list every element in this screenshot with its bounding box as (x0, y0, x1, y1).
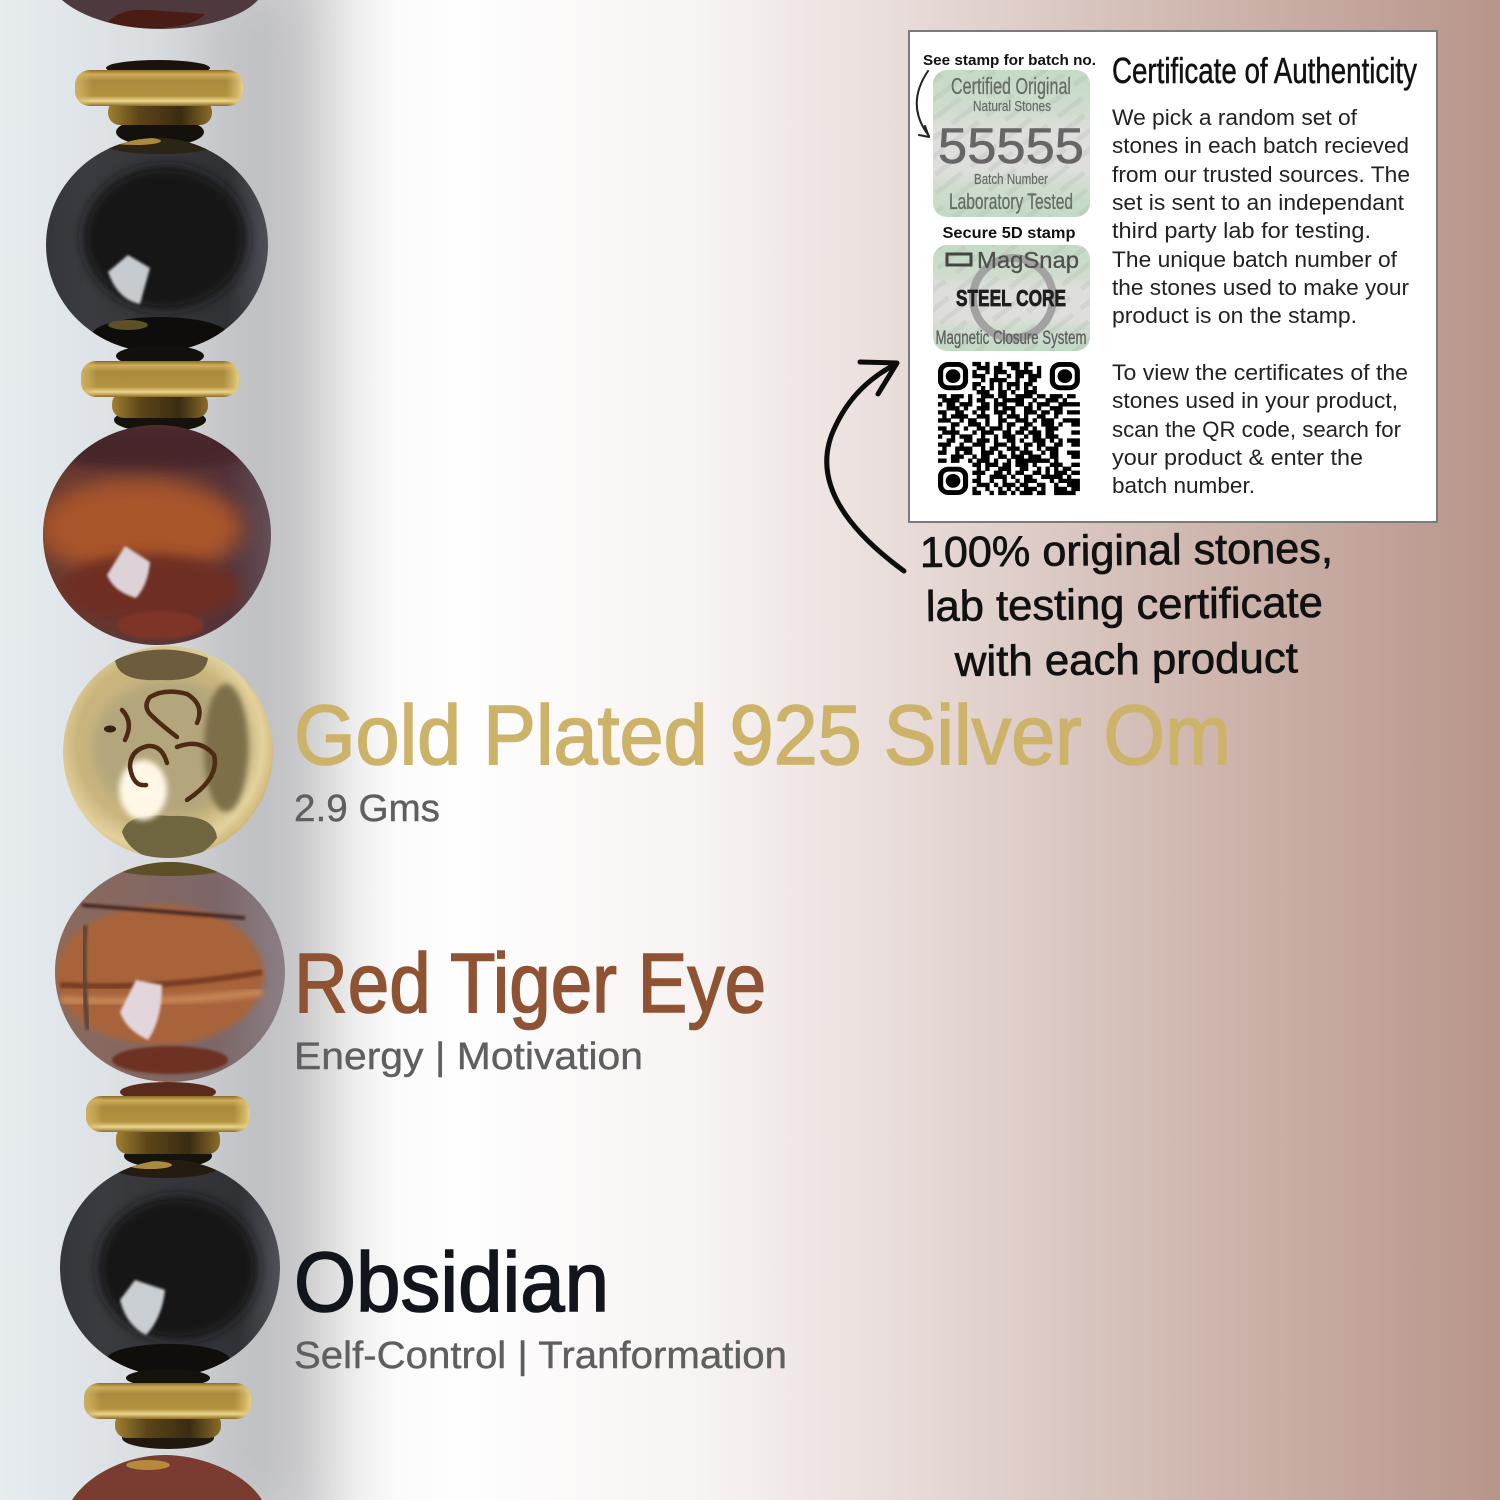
text block: batch testing explanation: the stones used to make your (1112, 275, 1409, 300)
callout: original stones: lab testing certificate (926, 579, 1323, 631)
stamp: certified original batch number: Certified Original (951, 73, 1071, 99)
text block: QR instructions: scan the QR code, search for (1112, 417, 1401, 442)
label: see stamp: See stamp for batch no. (923, 53, 1096, 69)
text block: batch testing explanation (1112, 105, 1410, 328)
stamp: magsnap steel core (933, 245, 1090, 351)
heading: gold plated 925 silver om (294, 688, 1231, 830)
text block: batch testing explanation: The unique batch number of (1112, 247, 1398, 272)
heading: red tiger eye (294, 936, 766, 1078)
subtext: self-control transformation: Self-Control | Tranformation (294, 1335, 787, 1377)
arrow: curved arrow to certificate (827, 362, 904, 571)
subtext: energy motivation: Energy | Motivation (294, 1036, 643, 1078)
text block: batch testing explanation: from our trusted sources. The (1112, 162, 1410, 187)
stamp: certified original batch number: Laboratory Tested (949, 189, 1073, 214)
stamp: certified original batch number: Natural Stones (973, 98, 1051, 115)
heading: obsidian: Obsidian (294, 1235, 609, 1329)
bead: top partial tiger eye (62, 0, 258, 29)
text block: batch testing explanation: set is sent to an independant (1112, 190, 1404, 215)
stamp: certified original batch number (933, 70, 1090, 217)
icon: small curved arrow (917, 71, 929, 137)
stamp: magsnap steel core: STEEL CORE (956, 285, 1066, 311)
heading: gold plated 925 silver om: Gold Plated 925 Silver Om (294, 688, 1231, 782)
bead: bottom partial tiger eye (72, 1455, 262, 1500)
om dot (104, 726, 116, 732)
text block: batch testing explanation: stones in each batch recieved (1112, 133, 1409, 158)
spacer: gold ring 4 (84, 1369, 251, 1449)
heading: certificate of authenticity: Certificate of Authenticity (1112, 50, 1417, 91)
spacer: gold ring 2 (81, 345, 239, 432)
stamp: magsnap steel core: MagSnap (977, 247, 1079, 273)
spacer: gold ring 3 (86, 1082, 250, 1168)
text block: batch testing explanation: product is on the stamp. (1112, 303, 1357, 328)
subtext: weight: 2.9 Gms (294, 788, 440, 830)
label: secure 5D stamp: Secure 5D stamp (942, 225, 1076, 242)
spacer: gold ring 1 (75, 60, 243, 146)
heading: obsidian (294, 1235, 787, 1377)
bead shadows on the surface (194, 10, 284, 1488)
text block: QR instructions: batch number. (1112, 473, 1255, 498)
panel: bead bracelet photo (38, 0, 295, 1500)
bead: gold plated om (63, 646, 273, 862)
bead bottom reflection (126, 1460, 170, 1470)
stamp: magsnap steel core: Magnetic Closure System (936, 328, 1086, 349)
text block: QR instructions: To view the certificates of the (1112, 360, 1408, 385)
bead: red tiger eye 2 (50, 858, 290, 1088)
text block: QR instructions: stones used in your product, (1112, 388, 1398, 413)
bead: obsidian 1 (46, 138, 268, 348)
stamp: certified original batch number: Batch Number (974, 171, 1048, 188)
text block: batch testing explanation: We pick a random set of (1112, 105, 1358, 130)
heading: red tiger eye: Red Tiger Eye (294, 936, 766, 1030)
bead: obsidian 2 (55, 1155, 285, 1380)
icon: om symbol (122, 692, 215, 800)
bead: red tiger eye 1 (38, 420, 275, 650)
text block: batch testing explanation: third party lab for testing. (1112, 218, 1371, 243)
panel: certificate of authenticity (909, 31, 1437, 522)
icon: QR code (938, 364, 1080, 493)
callout: original stones: with each product (954, 634, 1298, 686)
text block: QR instructions (1112, 360, 1408, 498)
stamp: certified original batch number: 55555 (938, 118, 1084, 174)
text block: QR instructions: your product & enter the (1112, 445, 1363, 470)
callout: original stones (920, 525, 1333, 686)
bead top patch (108, 10, 205, 28)
callout: original stones: 100% original stones, (920, 525, 1333, 577)
